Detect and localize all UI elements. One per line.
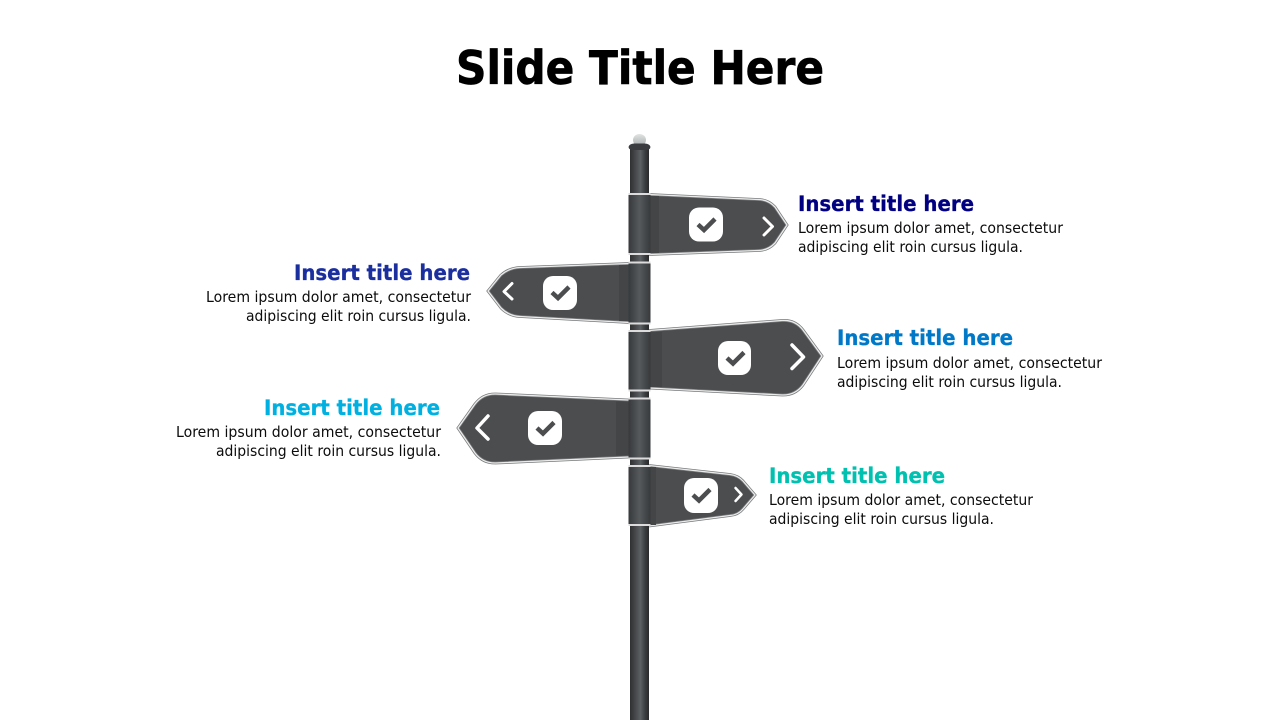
text block 5: adipiscing elit roin cursus ligula. <box>769 510 994 528</box>
icon: chevron <box>477 416 488 439</box>
title: Slide Title Here <box>456 41 824 95</box>
icon: check badge <box>543 276 577 310</box>
icon: check badge <box>689 208 723 242</box>
heading: Insert title here <box>769 464 945 488</box>
sign 5: right-pointing <box>628 465 755 526</box>
icon: chevron <box>764 218 772 235</box>
body: Lorem ipsum dolor amet, consectetur <box>837 354 1103 372</box>
text block 2: adipiscing elit roin cursus ligula. <box>246 307 471 325</box>
icon: chevron <box>736 488 742 501</box>
collar <box>628 331 650 390</box>
signpost pole <box>628 134 650 720</box>
heading: Insert title here <box>798 192 974 216</box>
icon: check badge <box>684 478 718 513</box>
body: Lorem ipsum dolor amet, consectetur <box>798 219 1064 237</box>
heading: Insert title here <box>294 261 470 285</box>
sign body <box>488 264 629 322</box>
text block 2 <box>206 261 472 325</box>
sign 1: right-pointing <box>628 193 787 255</box>
text block 3 <box>837 326 1103 391</box>
collar <box>628 466 650 525</box>
collar <box>628 398 650 458</box>
heading: Insert title here <box>264 396 440 420</box>
text block 3: adipiscing elit roin cursus ligula. <box>837 373 1062 391</box>
text block 1 <box>798 192 1064 256</box>
body: Lorem ipsum dolor amet, consectetur <box>206 288 472 306</box>
sign body <box>458 394 629 463</box>
body: Lorem ipsum dolor amet, consectetur <box>769 491 1034 509</box>
body: Lorem ipsum dolor amet, consectetur <box>176 423 442 441</box>
icon: chevron <box>504 284 512 299</box>
collar <box>628 262 650 323</box>
pole cap ball <box>633 134 646 146</box>
sign body <box>649 466 755 526</box>
collar <box>628 194 650 254</box>
sign 4: left-pointing <box>458 394 650 463</box>
pole cap <box>628 144 650 150</box>
sign body <box>649 194 787 254</box>
icon: check badge <box>528 411 562 445</box>
pole shaft <box>630 147 649 720</box>
text block 4: adipiscing elit roin cursus ligula. <box>216 442 441 460</box>
text block 1: adipiscing elit roin cursus ligula. <box>798 238 1023 256</box>
sign body <box>649 320 822 395</box>
sign 2: left-pointing <box>488 262 650 324</box>
text block 5 <box>769 464 1034 528</box>
sign 3: right-pointing <box>628 320 822 395</box>
heading: Insert title here <box>837 326 1013 350</box>
icon: check badge <box>718 341 751 375</box>
text block 4 <box>176 396 442 460</box>
icon: chevron <box>792 345 804 368</box>
